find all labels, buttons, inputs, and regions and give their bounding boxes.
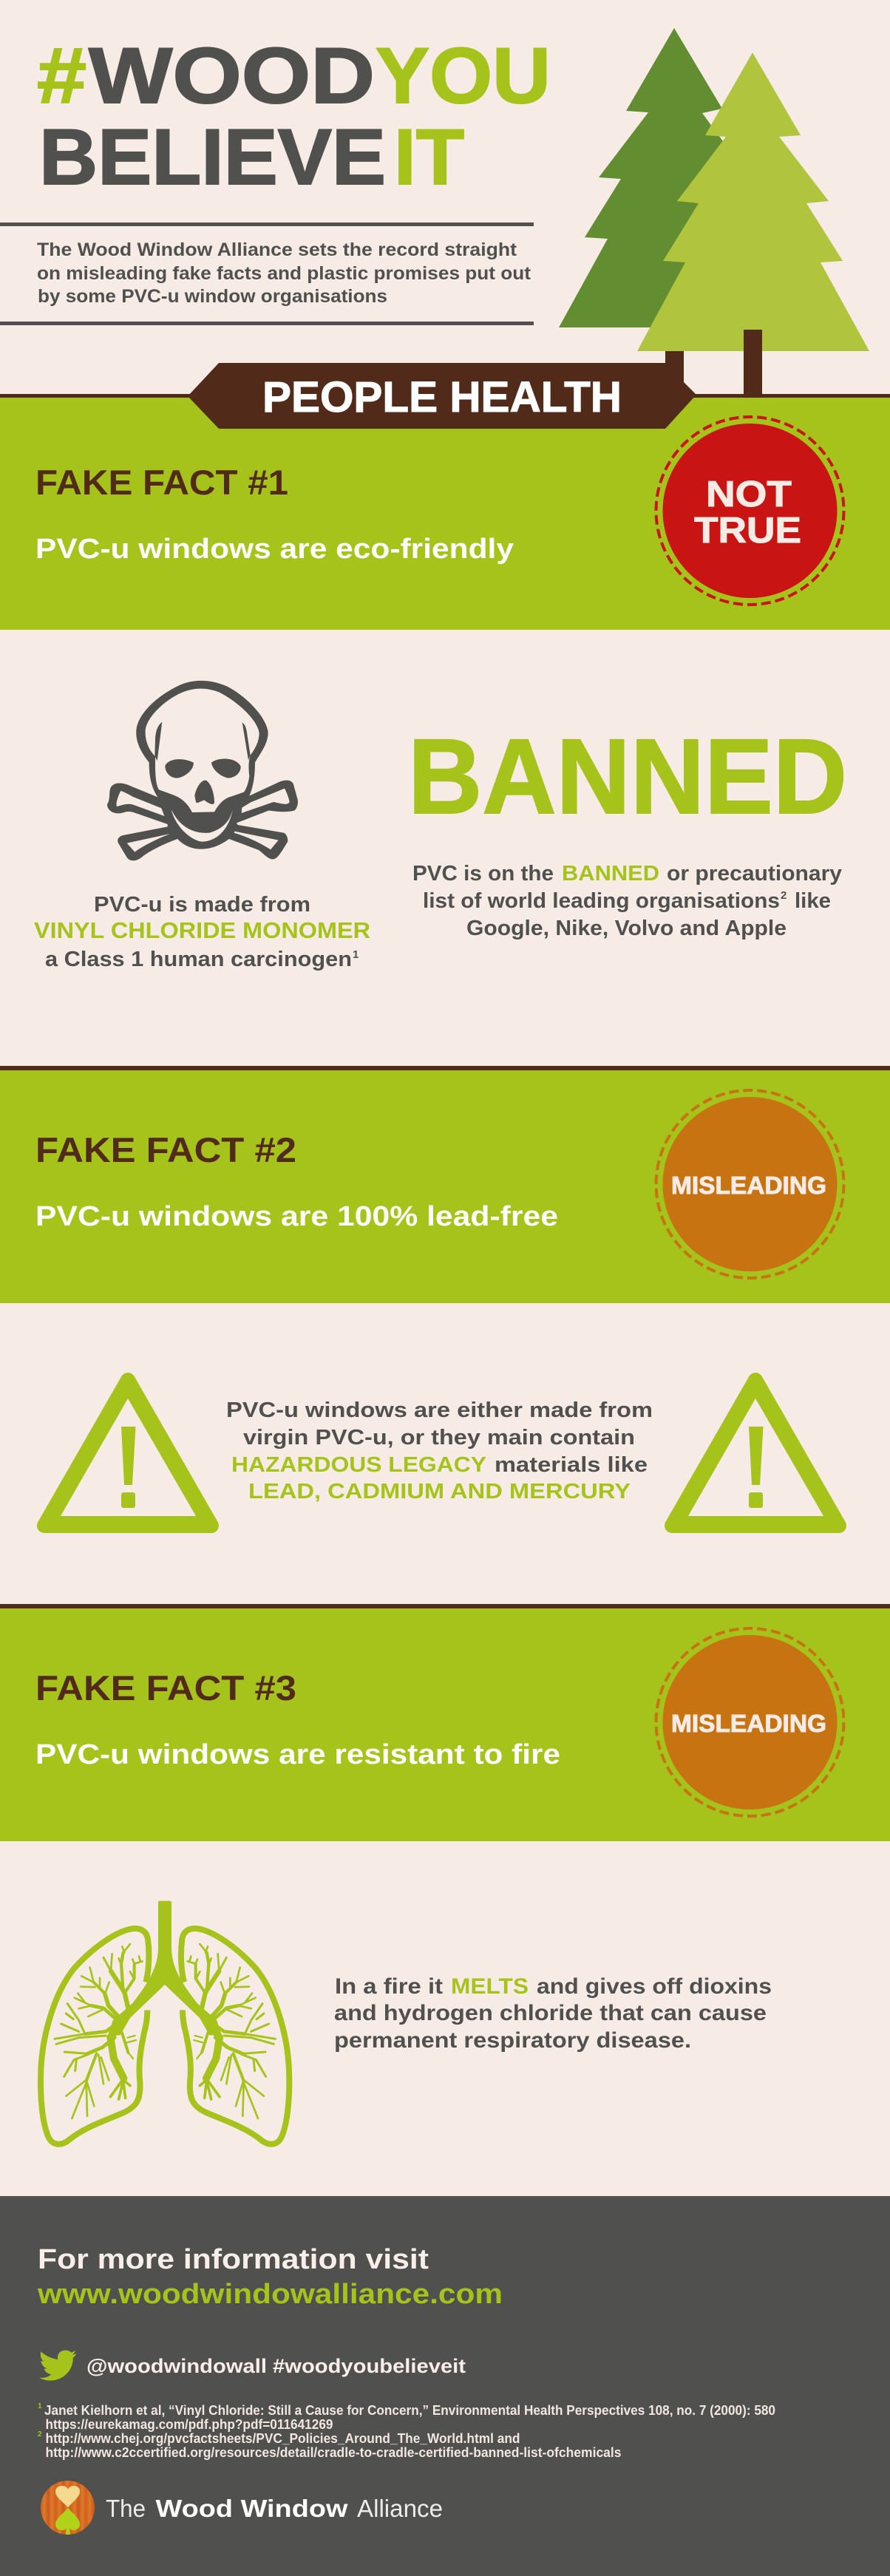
icon: skull and crossbones <box>107 681 298 860</box>
text block: fire and dioxins: and gives off dioxins <box>537 1974 772 1999</box>
panel: fake fact 1 <box>0 394 890 630</box>
panel: fake fact 3 <box>0 1604 890 1841</box>
text block: hazardous legacy materials: HAZARDOUS LEGACY <box>231 1453 486 1477</box>
call to action text: For more information visit <box>38 2244 429 2275</box>
heading: fake fact 1: FAKE FACT #1 <box>35 463 288 502</box>
logo: wood window alliance emblem <box>41 2481 95 2535</box>
panel: fake fact 2 <box>0 1066 890 1303</box>
text block: fire and dioxins <box>334 1974 772 2053</box>
intro text block: The Wood Window Alliance sets the record straight <box>37 239 517 260</box>
text block: fire and dioxins: and hydrogen chloride that can cause <box>334 2001 767 2025</box>
references: https://eurekamag.com/pdf.php?pdf=011641269 <box>46 2417 333 2432</box>
icon: warning triangle right <box>672 1380 839 1526</box>
text block: fire and dioxins: MELTS <box>451 1974 529 1999</box>
references <box>38 2402 775 2460</box>
badge: not true <box>656 417 844 605</box>
text block: fire and dioxins: In a fire it <box>335 1974 443 1999</box>
logo: wordmark: The <box>106 2495 146 2522</box>
text block: hazardous legacy materials: virgin PVC-u, or they main contain <box>243 1426 635 1450</box>
text block: fire and dioxins: permanent respiratory disease. <box>334 2028 691 2053</box>
icon: twitter bird <box>39 2351 76 2381</box>
claim: eco-friendly: PVC-u windows are eco-friendly <box>35 534 514 565</box>
text block: banned list: or precautionary <box>667 862 842 886</box>
references: 1 <box>38 2402 42 2410</box>
icon: dark green tree <box>559 28 789 384</box>
banner: people health: PEOPLE HEALTH <box>262 373 622 421</box>
title: WOOD <box>89 31 375 120</box>
claim: resistant to fire: PVC-u windows are resistant to fire <box>35 1739 560 1770</box>
text block: vinyl chloride monomer: 1 <box>353 948 359 961</box>
badge: misleading <box>656 1628 844 1816</box>
heading: fake fact 2: FAKE FACT #2 <box>35 1130 296 1169</box>
title <box>37 31 551 201</box>
icon: light green tree <box>637 52 869 396</box>
references: 2 <box>38 2430 42 2439</box>
text block: vinyl chloride monomer: PVC-u is made from <box>94 893 310 917</box>
text block: vinyl chloride monomer: VINYL CHLORIDE MONOMER <box>34 917 370 943</box>
website url: www.woodwindowalliance.com <box>37 2279 503 2310</box>
title: YOU <box>376 31 551 120</box>
badge: misleading: MISLEADING <box>671 1172 826 1199</box>
references: Janet Kielhorn et al, “Vinyl Chloride: Still a Cause for Concern,” Environmental Health Perspectives 108, no. 7 (2000): 580 <box>44 2403 775 2418</box>
claim: lead-free: PVC-u windows are 100% lead-free <box>35 1201 558 1232</box>
text block: banned list: PVC is on the <box>412 862 554 886</box>
social handles: @woodwindowall #woodyoubelieveit <box>86 2355 466 2377</box>
logo: wordmark: Wood Window <box>155 2495 348 2522</box>
title: BELIEVE <box>39 112 386 201</box>
text block: hazardous legacy materials: PVC-u windows are either made from <box>226 1399 653 1422</box>
intro text block: by some PVC-u window organisations <box>38 286 387 307</box>
icon: warning triangle left <box>44 1380 211 1526</box>
heading: fake fact 3: FAKE FACT #3 <box>35 1668 296 1707</box>
icon: lungs <box>41 1901 289 2144</box>
text block: hazardous legacy materials <box>226 1399 653 1503</box>
intro text block: on misleading fake facts and plastic promises put out <box>37 263 531 284</box>
badge: not true: TRUE <box>694 511 801 551</box>
text block: vinyl chloride monomer: a Class 1 human carcinogen <box>45 948 352 971</box>
text block: vinyl chloride monomer <box>34 893 370 971</box>
badge: misleading: MISLEADING <box>671 1710 826 1737</box>
intro text block <box>0 222 534 325</box>
heading: banned: BANNED <box>408 717 847 836</box>
text block: banned list: like <box>795 889 831 913</box>
references: http://www.c2ccertified.org/resources/detail/cradle-to-cradle-certified-banned-list-ofchemicals <box>46 2445 621 2460</box>
text block: banned list: BANNED <box>562 862 659 886</box>
text block: banned list: list of world leading organisations <box>423 889 780 913</box>
badge: misleading <box>656 1090 844 1278</box>
text block: hazardous legacy materials: LEAD, CADMIUM AND MERCURY <box>248 1480 631 1503</box>
badge: not true: NOT <box>706 475 792 514</box>
panel: footer <box>0 2196 890 2576</box>
text block: hazardous legacy materials: materials like <box>495 1453 648 1477</box>
references: http://www.chej.org/pvcfactsheets/PVC_Policies_Around_The_World.html and <box>46 2431 520 2446</box>
title: IT <box>394 112 464 201</box>
text block: banned list: 2 <box>781 889 787 902</box>
banner: people health <box>188 363 696 429</box>
logo: wordmark: Alliance <box>357 2495 443 2522</box>
title: # <box>37 31 86 120</box>
text block: banned list <box>412 862 842 940</box>
text block: banned list: Google, Nike, Volvo and Apple <box>466 917 787 940</box>
logo: wordmark <box>106 2495 443 2522</box>
